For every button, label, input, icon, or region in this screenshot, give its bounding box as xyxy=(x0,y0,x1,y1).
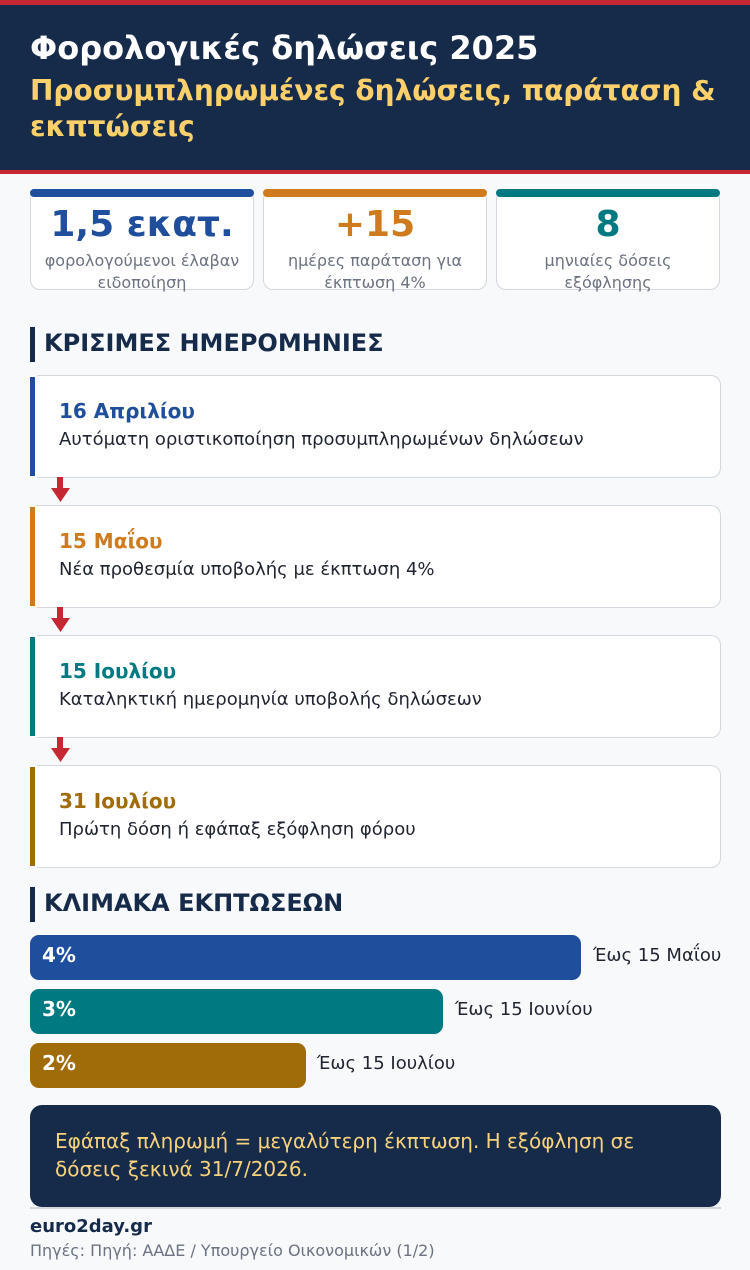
title: Φορολογικές δηλώσεις 2025 xyxy=(30,29,538,67)
stat card: extension: έκπτωση 4% xyxy=(324,273,426,292)
stat card: extension: ημέρες παράταση για xyxy=(288,251,462,270)
bar: 4% xyxy=(30,935,581,980)
arrow xyxy=(51,737,70,762)
arrow xyxy=(51,607,70,632)
stat card: instalments: εξόφλησης xyxy=(564,273,652,292)
heading: discount scale xyxy=(30,887,720,922)
bar: 2%: 2% xyxy=(42,1051,76,1075)
bar label: 2%: Έως 15 Ιουλίου xyxy=(317,1053,455,1074)
footer xyxy=(30,1207,721,1257)
date card: 31 July: 31 Ιουλίου xyxy=(59,789,176,813)
stat card: instalments xyxy=(496,189,720,290)
stat card: taxpayers: φορολογούμενοι έλαβαν xyxy=(45,251,239,270)
date card: 16 April xyxy=(30,375,721,478)
bar label: 4%: Έως 15 Μαΐου xyxy=(593,945,721,966)
date card: 15 July xyxy=(30,635,721,738)
stat card: instalments: 8 xyxy=(595,204,621,245)
date card: 15 July: Καταληκτική ημερομηνία υποβολής δηλώσεων xyxy=(59,689,482,710)
callout: Εφάπαξ πληρωμή = μεγαλύτερη έκπτωση. Η εξόφληση σε δόσεις ξεκινά 31/7/2026. xyxy=(55,1129,634,1181)
heading: discount scale: ΚΛΙΜΑΚΑ ΕΚΠΤΩΣΕΩΝ xyxy=(44,889,343,917)
callout xyxy=(30,1105,721,1207)
date card: 31 July: Πρώτη δόση ή εφάπαξ εξόφληση φόρου xyxy=(59,819,416,840)
stat card: extension xyxy=(263,189,487,290)
bar: 3% xyxy=(30,989,443,1034)
stat card: taxpayers xyxy=(30,189,254,290)
arrow xyxy=(51,477,70,502)
source brand: euro2day.gr xyxy=(30,1216,152,1237)
stat card: extension: +15 xyxy=(335,204,415,245)
header xyxy=(0,0,750,174)
heading: critical dates: ΚΡΙΣΙΜΕΣ ΗΜΕΡΟΜΗΝΙΕΣ xyxy=(44,329,384,357)
bar label: 3%: Έως 15 Ιουνίου xyxy=(455,999,593,1020)
date card: 15 May: 15 Μαΐου xyxy=(59,529,162,553)
bar: 2% xyxy=(30,1043,306,1088)
bar: 3%: 3% xyxy=(42,997,76,1021)
stat card: taxpayers: ειδοποίηση xyxy=(98,273,186,292)
source note: Πηγές: Πηγή: ΑΑΔΕ / Υπουργείο Οικονομικών (1/2) xyxy=(30,1241,435,1260)
heading: critical dates xyxy=(30,327,720,362)
date card: 15 July: 15 Ιουλίου xyxy=(59,659,176,683)
subtitle: Προσυμπληρωμένες δηλώσεις, παράταση & εκπτώσεις xyxy=(30,74,716,143)
date card: 15 May: Νέα προθεσμία υποβολής με έκπτωση 4% xyxy=(59,559,435,580)
date card: 15 May xyxy=(30,505,721,608)
date card: 16 April: 16 Απριλίου xyxy=(59,399,195,423)
stat card: instalments: μηνιαίες δόσεις xyxy=(545,251,671,270)
bar: 4%: 4% xyxy=(42,943,76,967)
date card: 31 July xyxy=(30,765,721,868)
date card: 16 April: Αυτόματη οριστικοποίηση προσυμπληρωμένων δηλώσεων xyxy=(59,429,584,450)
stat card: taxpayers: 1,5 εκατ. xyxy=(50,204,234,245)
